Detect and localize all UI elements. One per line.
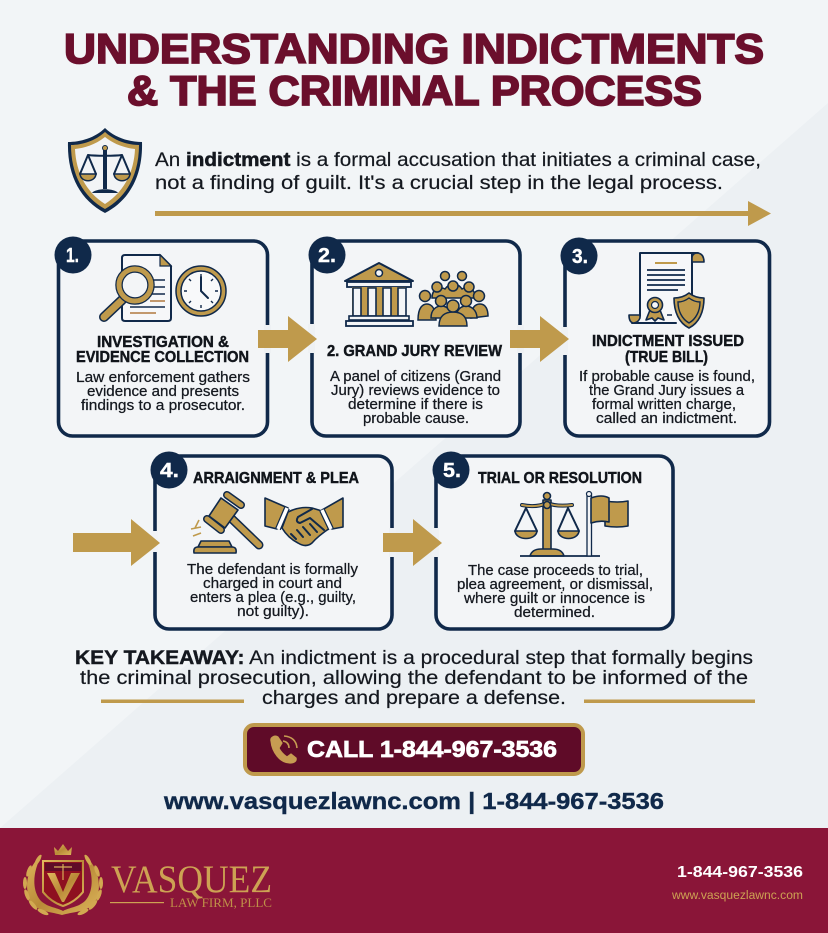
panel: step 5	[432, 452, 673, 629]
step number	[54, 236, 92, 274]
body text	[187, 562, 359, 620]
heading: EVIDENCE COLLECTION	[76, 349, 249, 366]
body text	[330, 369, 501, 427]
title	[64, 25, 764, 114]
step number: 1.	[66, 245, 79, 267]
icon: handshake	[265, 498, 343, 546]
body text	[579, 369, 755, 427]
body text: the Grand Jury issues a	[589, 383, 745, 399]
body text: charged in court and	[203, 576, 342, 592]
icon: gavel	[191, 495, 259, 553]
key takeaway	[75, 647, 755, 709]
heading: (TRUE BILL)	[625, 349, 708, 366]
heading: ARRAIGNMENT & PLEA	[193, 470, 359, 487]
arrow: step 4 to 5	[383, 519, 442, 566]
step number: 2.	[318, 245, 336, 267]
body text: where guilt or innocence is	[463, 591, 645, 607]
step number: 3.	[572, 246, 588, 268]
heading: TRIAL OR RESOLUTION	[478, 470, 642, 487]
key takeaway: the criminal prosecution, allowing the defendant to be informed of the	[80, 667, 748, 689]
footer contact: www.vasquezlawnc.com	[671, 890, 803, 902]
body text: Law enforcement gathers	[76, 370, 250, 386]
body text: The case proceeds to trial,	[468, 563, 643, 579]
key takeaway: charges and prepare a defense.	[262, 687, 566, 709]
logo: LAW FIRM, PLLC	[170, 896, 272, 910]
body text: determine if there is	[348, 397, 483, 413]
body text: If probable cause is found,	[579, 369, 755, 385]
body text: evidence and presents	[87, 384, 239, 400]
title: UNDERSTANDING INDICTMENTS	[64, 25, 764, 72]
website and phone: www.vasquezlawnc.com | 1-844-967-3536	[163, 788, 664, 814]
body text: called an indictment.	[596, 411, 737, 427]
icon: shield with scales	[68, 128, 142, 213]
footer contact	[671, 864, 803, 902]
icon: indictment document	[629, 253, 704, 328]
body text: enters a plea (e.g., guilty,	[190, 590, 356, 606]
heading: INVESTIGATION &	[97, 334, 229, 351]
call button: CALL 1-844-967-3536	[307, 736, 557, 762]
icon: jury of people	[418, 272, 488, 326]
key takeaway: KEY TAKEAWAY: An indictment is a procedural step that formally begins	[75, 647, 753, 669]
arrow: step 1 to 2	[258, 316, 317, 362]
icon: crest	[23, 844, 103, 916]
icon: phone	[271, 736, 297, 763]
logo	[23, 844, 272, 916]
icon: document and magnifier	[104, 255, 171, 321]
panel: step 3	[560, 238, 770, 436]
icon: courthouse	[345, 263, 413, 326]
body text	[457, 563, 653, 621]
arrow: into step 4	[73, 519, 160, 566]
logo: VASQUEZ	[111, 858, 272, 901]
panel: step 1	[54, 236, 268, 436]
heading	[76, 334, 249, 366]
arrow: step 2 to 3	[510, 316, 569, 362]
body text: determined.	[514, 605, 595, 621]
intro text: An indictment is a formal accusation that initiates a criminal case,	[155, 149, 761, 171]
step number: 5.	[443, 460, 461, 482]
heading: 2. GRAND JURY REVIEW	[327, 343, 502, 360]
step number	[432, 452, 470, 488]
call button	[245, 725, 583, 774]
panel: step 4	[150, 452, 392, 629]
icon: flag	[586, 492, 628, 556]
intro text: not a finding of guilt. It's a crucial step in the legal process.	[155, 172, 723, 194]
icon: scales	[515, 492, 600, 556]
body text: probable cause.	[363, 411, 469, 427]
panel: step 2	[308, 236, 520, 436]
title: & THE CRIMINAL PROCESS	[127, 67, 702, 114]
heading: INDICTMENT ISSUED	[592, 333, 744, 350]
body text: findings to a prosecutor.	[81, 398, 245, 414]
intro text	[155, 149, 761, 194]
step number	[308, 236, 346, 274]
body text: plea agreement, or dismissal,	[457, 577, 653, 593]
icon: clock	[176, 266, 226, 316]
step number: 4.	[160, 460, 179, 482]
step number	[560, 238, 598, 274]
body text: formal written charge,	[592, 397, 736, 413]
heading	[592, 333, 744, 366]
body text: not guilty).	[237, 604, 309, 620]
footer contact: 1-844-967-3536	[677, 864, 803, 881]
body text: The defendant is formally	[187, 562, 359, 578]
arrow: timeline	[155, 201, 771, 226]
body text	[76, 370, 250, 414]
step number	[150, 452, 188, 488]
body text: Jury) reviews evidence to	[331, 383, 500, 399]
body text: A panel of citizens (Grand	[330, 369, 501, 385]
footer band	[0, 828, 828, 933]
